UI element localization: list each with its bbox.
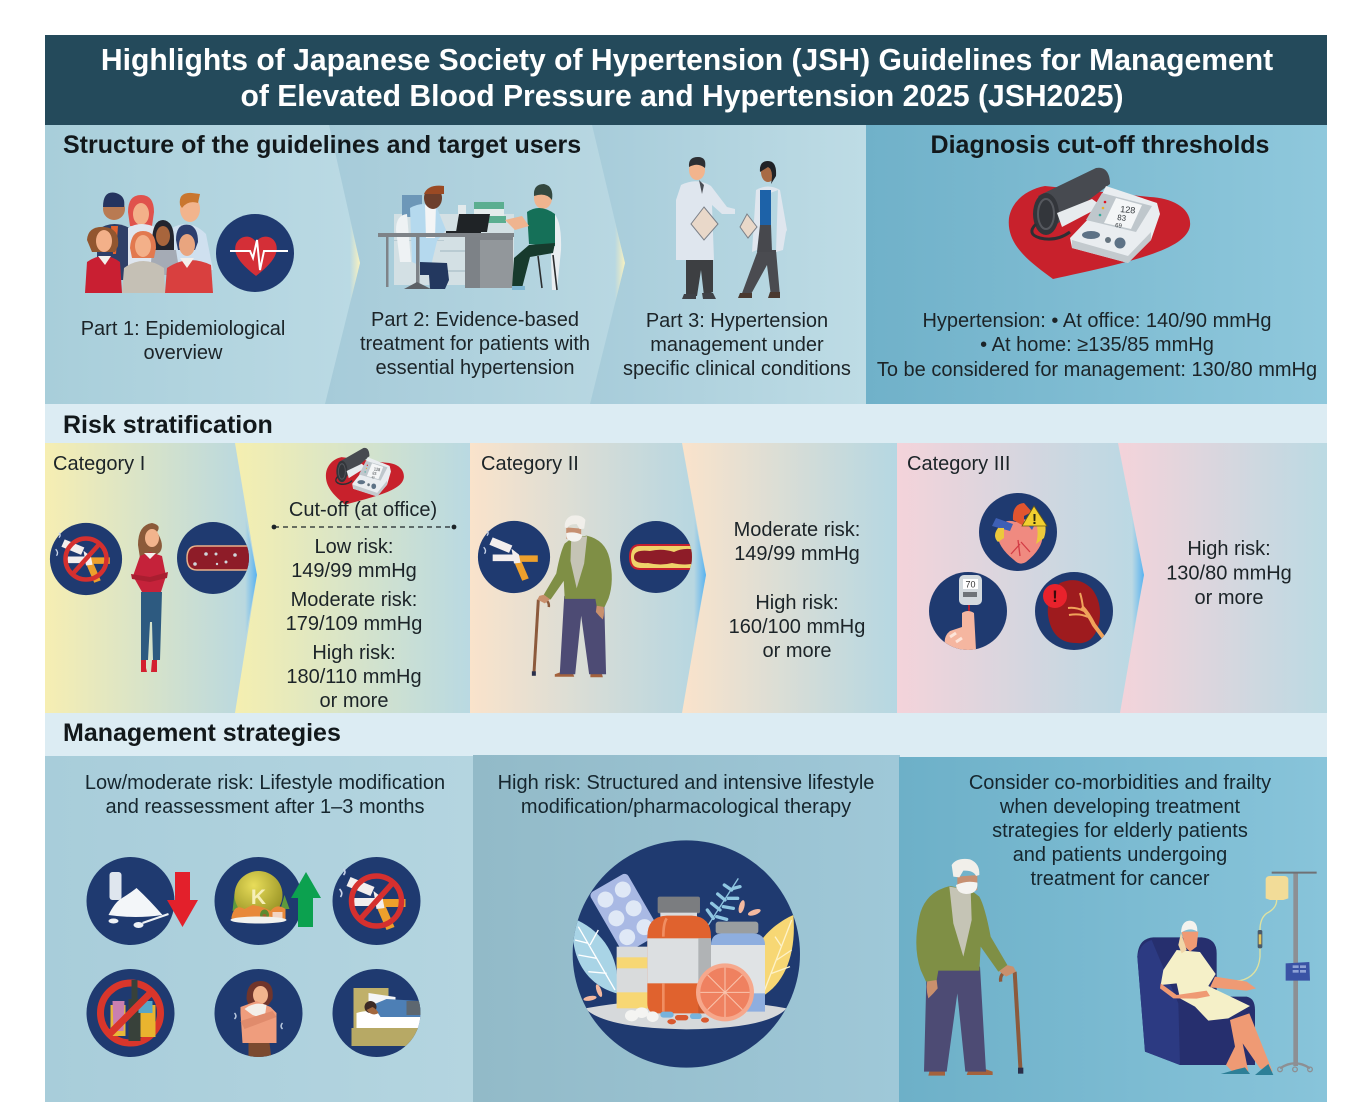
text: diagnosis thresholds: Hypertension: • At office: 140/90 mmHg xyxy=(922,310,1272,332)
text: part 2: treatment for patients with xyxy=(360,333,590,355)
heading: structure: Structure of the guidelines and target users xyxy=(63,131,581,159)
icon: heart disease warning xyxy=(979,493,1057,571)
text: part 1: Part 1: Epidemiological xyxy=(81,318,285,340)
heading: diagnosis: Diagnosis cut-off thresholds xyxy=(931,131,1269,159)
arrow: red down xyxy=(167,872,198,927)
text: part 2: Part 2: Evidence-based xyxy=(371,309,579,331)
label: category III: Category III xyxy=(907,453,1010,475)
text: part 2: essential hypertension xyxy=(375,357,575,379)
panel: category III left xyxy=(897,443,1144,713)
icon: narrowed blood vessel xyxy=(620,521,696,593)
text: category III risk values: 130/80 mmHg xyxy=(1166,562,1292,584)
text: category III risk values: High risk: xyxy=(1187,538,1271,560)
panel: diagnosis background xyxy=(866,125,1327,404)
dashed divider with end dots xyxy=(272,525,456,529)
text: part 1: overview xyxy=(144,342,223,364)
icon: no smoking (category I) xyxy=(50,523,122,595)
icon: blood vessel xyxy=(177,522,253,594)
illustration: woman xyxy=(131,523,168,672)
panel: pharmacological therapy xyxy=(473,755,900,1102)
panel: structure part 1 background xyxy=(45,125,360,404)
panel: lifestyle management xyxy=(45,756,473,1102)
illustration: elderly man with cane xyxy=(916,859,1023,1076)
illustration: two doctors xyxy=(676,157,787,299)
text: co-morbidities: when developing treatment xyxy=(999,796,1241,818)
illustration: blood pressure monitor on heart xyxy=(1009,168,1190,279)
text: category I risk values: 149/99 mmHg xyxy=(291,560,417,582)
icon: no smoking xyxy=(332,857,420,945)
band: risk stratification xyxy=(45,404,1327,443)
icon: medications xyxy=(573,840,800,1068)
illustration: patient receiving infusion xyxy=(1137,873,1317,1075)
label: category I: Category I xyxy=(53,453,145,475)
icon: blood glucose meter: 70 xyxy=(965,580,976,590)
icon: cold exposure xyxy=(214,969,302,1059)
text: part 3: management under xyxy=(650,334,824,356)
illustration: doctor and patient xyxy=(378,184,561,290)
arrow: category II xyxy=(694,515,706,640)
text: category II risk values: High risk: xyxy=(755,592,839,614)
icon: cigarettes (category II) xyxy=(478,521,550,593)
illustration: group of people xyxy=(85,193,213,293)
icon: heart with ecg xyxy=(216,214,294,292)
icon: potassium rich food: K xyxy=(251,886,266,909)
panel: category III right xyxy=(1118,443,1327,713)
arrow: part 1 to part 2 xyxy=(350,220,360,304)
band: management strategies: Management strategies xyxy=(63,719,341,747)
text: part 3: Part 3: Hypertension xyxy=(646,310,828,332)
arrow: part 2 to part 3 xyxy=(615,222,625,304)
text: category II risk values: 149/99 mmHg xyxy=(734,543,860,565)
text: category I risk values: 180/110 mmHg xyxy=(286,666,422,688)
illustration: elderly man (category II) xyxy=(532,515,612,677)
text: co-morbidities: treatment for cancer xyxy=(1031,868,1210,890)
panel: category II left xyxy=(470,443,706,713)
text: diagnosis thresholds: • At home: ≥135/85 mmHg xyxy=(980,334,1214,356)
text: category I risk values: High risk: xyxy=(312,642,396,664)
panel: structure part 3 background xyxy=(590,125,867,404)
icon: small blood pressure monitor xyxy=(326,448,404,505)
text: co-morbidities: strategies for elderly patients xyxy=(992,820,1248,842)
text: category I risk values: Low risk: xyxy=(315,536,393,558)
text: cut-off heading: Cut-off (at office) xyxy=(289,499,437,521)
title banner xyxy=(45,35,1327,125)
icon: kidney warning: ! xyxy=(1052,587,1058,606)
text: category II risk values: 160/100 mmHg xyxy=(729,616,865,638)
text: category II risk values: Moderate risk: xyxy=(734,519,860,541)
icon: heart disease warning: ! xyxy=(1032,511,1037,528)
panel: category I left xyxy=(45,443,257,713)
text: category I risk values: or more xyxy=(320,690,388,712)
icon: blood glucose meter xyxy=(929,572,1007,650)
band: management strategies xyxy=(45,713,1327,757)
panel: category I right xyxy=(235,443,470,713)
icon: adequate sleep xyxy=(332,969,422,1057)
text: category I risk values: 179/109 mmHg xyxy=(286,613,422,635)
text: category I risk values: Moderate risk: xyxy=(291,589,417,611)
panel: category II right xyxy=(682,443,897,713)
text: category III risk values: or more xyxy=(1195,587,1263,609)
icon: salt reduction xyxy=(86,857,174,945)
label: category II: Category II xyxy=(481,453,579,475)
text: high risk: High risk: Structured and intensive lifestyle xyxy=(498,772,874,794)
arrow: green up xyxy=(291,872,321,927)
icon: kidney warning xyxy=(1035,572,1113,650)
text: part 3: specific clinical conditions xyxy=(623,358,851,380)
text: diagnosis thresholds: To be considered for management: 130/80 mmHg xyxy=(877,359,1317,381)
text: category II risk values: or more xyxy=(763,640,831,662)
panel: elderly and cancer xyxy=(899,757,1327,1102)
icon: potassium rich food xyxy=(214,857,302,945)
arrow: category III xyxy=(1132,515,1144,640)
title banner: Highlights of Japanese Society of Hypertension (JSH) Guidelines for Management xyxy=(101,44,1273,77)
text: co-morbidities: Consider co-morbidities and frailty xyxy=(969,772,1271,794)
text: co-morbidities: and patients undergoing xyxy=(1013,844,1227,866)
text: low moderate risk: and reassessment after 1–3 months xyxy=(105,796,425,818)
band: risk stratification: Risk stratification xyxy=(63,411,273,439)
title banner: of Elevated Blood Pressure and Hypertension 2025 (JSH2025) xyxy=(240,80,1124,113)
panel: structure part 2 background xyxy=(325,125,625,404)
arrow: category I xyxy=(245,515,257,640)
text: low moderate risk: Low/moderate risk: Lifestyle modification xyxy=(85,772,445,794)
text: high risk: modification/pharmacological therapy xyxy=(521,796,851,818)
icon: no alcohol xyxy=(86,969,174,1057)
